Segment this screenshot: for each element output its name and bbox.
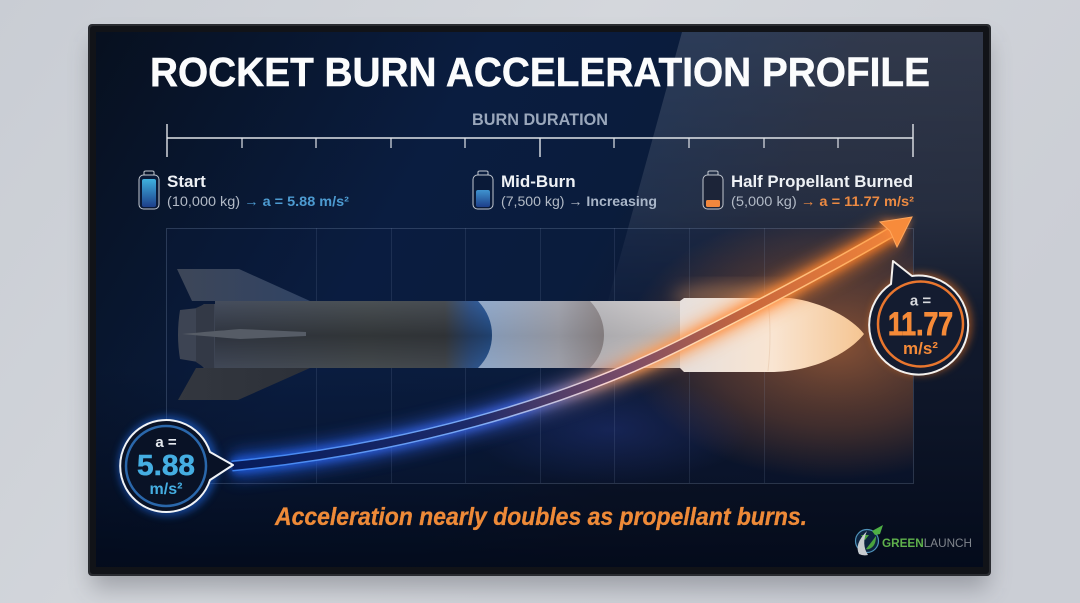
callout: 5.88: 5.88: [137, 450, 195, 482]
acceleration curve: [232, 217, 912, 466]
half propellant label: Half Propellant Burned: [731, 172, 913, 191]
callout: 5.88: [118, 416, 233, 516]
start detail: (10,000 kg) → a = 5.88 m/s²: [167, 193, 349, 209]
icon: full battery: [139, 171, 159, 209]
caption: Acceleration nearly doubles as propellant burns.: [274, 503, 807, 531]
glare: [600, 32, 983, 330]
nose glow: [673, 284, 797, 308]
fin on body: [182, 329, 306, 339]
mid-burn detail: (7,500 kg) → Increasing: [501, 193, 657, 209]
callout: 5.88: m/s²: [150, 481, 182, 498]
callout: 11.77: [869, 261, 972, 375]
mid body: [478, 301, 604, 368]
icon: globe and rocket: [856, 525, 883, 555]
rocket fins: [177, 269, 310, 301]
rocket engine: [178, 304, 215, 368]
display frame: [88, 24, 991, 576]
mid-burn label: Mid-Burn: [501, 172, 576, 191]
icon: half battery: [473, 171, 493, 209]
timeline label: BURN DURATION: [472, 110, 608, 129]
callout: 11.77: 11.77: [888, 306, 953, 342]
arrow head: [881, 218, 912, 246]
timeline: burn duration: [167, 110, 913, 157]
stage: half propellant burned: [703, 171, 914, 209]
chart panel with grid: [166, 228, 914, 484]
icon: low battery: [703, 171, 723, 209]
callout: 5.88: a =: [155, 434, 177, 451]
callout: 11.77: a =: [910, 292, 931, 310]
title: ROCKET BURN ACCELERATION PROFILE: [150, 49, 930, 95]
start label: Start: [167, 172, 206, 191]
stage: start: [139, 171, 349, 209]
timeline axis: [167, 124, 913, 157]
callout: 11.77: m/s²: [903, 339, 938, 358]
screen background: [96, 32, 983, 567]
depleted propellant body: [215, 301, 492, 368]
wordmark: GREENLAUNCH: [882, 536, 972, 550]
logo: GreenLaunch: [856, 525, 972, 555]
half propellant detail: (5,000 kg) → a = 11.77 m/s²: [731, 193, 914, 209]
nose cone: [680, 298, 864, 372]
stage: mid-burn: [473, 171, 657, 209]
rocket: [177, 269, 864, 400]
